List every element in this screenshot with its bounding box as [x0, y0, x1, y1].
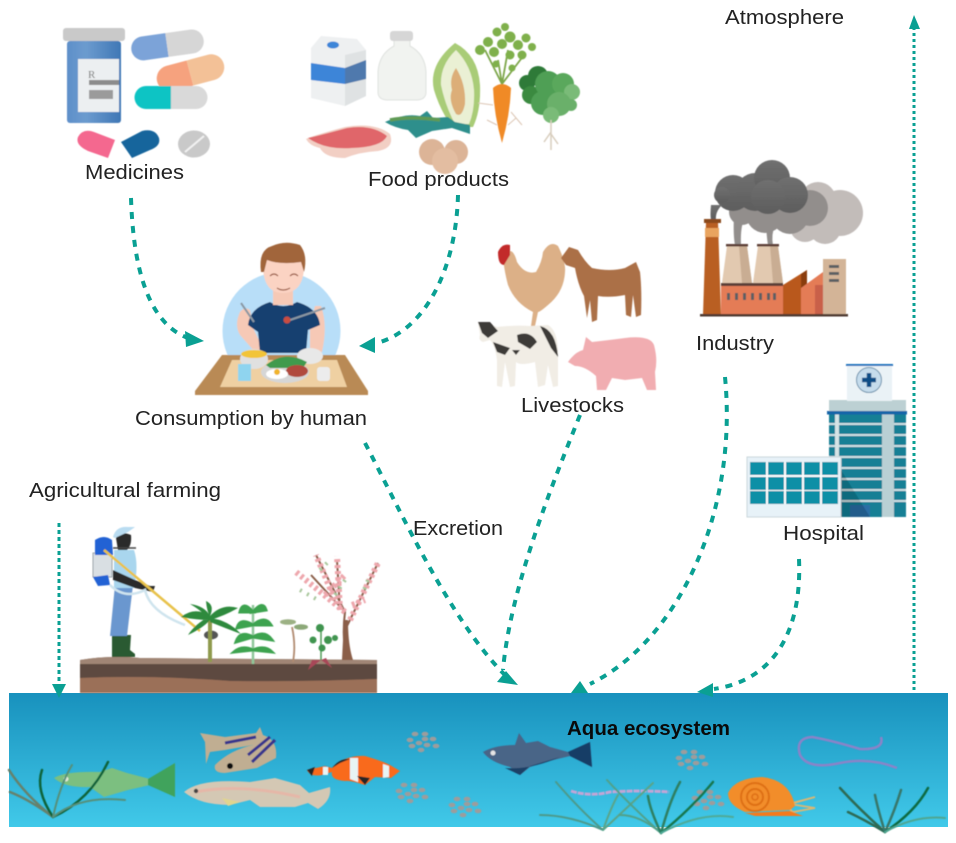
soil — [80, 657, 377, 693]
aquatic life — [9, 727, 945, 833]
orange capsule — [154, 51, 227, 94]
fish — [385, 111, 470, 138]
blossom tree — [296, 555, 378, 660]
illustration: person eating — [195, 243, 368, 395]
milk carton — [311, 36, 366, 106]
blue capsule — [130, 28, 205, 62]
rooster — [498, 244, 565, 326]
palm plant — [181, 601, 241, 662]
leafy shrub — [234, 605, 272, 664]
illustration: livestock animals — [478, 244, 656, 390]
icon: food products — [306, 23, 580, 174]
label: Industry: Industry — [696, 333, 774, 355]
icon: medicines — [63, 28, 227, 158]
panel: aqua ecosystem water body — [9, 693, 948, 827]
arrow: industry to water — [571, 377, 727, 693]
cooling towers — [722, 244, 783, 283]
label: Aqua ecosystem: Aqua ecosystem — [567, 718, 730, 740]
table with meal — [195, 348, 368, 395]
green fish — [54, 763, 175, 797]
small seedlings — [280, 619, 338, 670]
milk bottle — [378, 31, 426, 100]
blue capsule half — [121, 130, 159, 158]
eggs — [419, 139, 468, 174]
carrot — [475, 23, 536, 143]
illustration: industry factory — [700, 160, 863, 316]
goat — [561, 247, 641, 322]
label: Medicines: Medicines — [85, 162, 184, 184]
chimney — [703, 219, 721, 315]
zebrafish — [200, 727, 276, 773]
arrow: water to atmosphere — [909, 15, 920, 690]
low wing — [747, 457, 870, 517]
roof sign with cross — [846, 364, 893, 401]
lettuce head — [433, 43, 480, 127]
illustration: hospital — [747, 364, 907, 517]
pale worm — [571, 791, 669, 794]
label: Hospital: Hospital — [783, 523, 864, 545]
killifish — [184, 778, 330, 809]
pink capsule half — [77, 131, 115, 158]
arrow: excretion from human to water — [365, 443, 518, 685]
aquatic grass left — [9, 762, 125, 817]
teal capsule — [134, 86, 208, 109]
cow — [478, 322, 558, 387]
label: Atmosphere: Atmosphere — [725, 7, 844, 29]
blue circle — [222, 272, 340, 390]
aquatic grass center — [540, 780, 733, 833]
tablet — [178, 130, 210, 158]
egg clusters — [396, 732, 724, 817]
arrow: livestock to water — [503, 415, 580, 670]
arrow: medicines to human — [131, 198, 204, 347]
factory buildings — [700, 259, 848, 316]
head — [260, 243, 305, 305]
arrow: hospital to water — [697, 559, 799, 697]
pill bottle: R — [88, 69, 96, 81]
pig — [568, 337, 656, 390]
arrow: agricultural farming to water — [52, 523, 66, 698]
smoke clouds — [710, 160, 863, 245]
label: Livestocks: Livestocks — [521, 395, 624, 417]
tower — [827, 400, 907, 517]
purple worm — [799, 737, 897, 768]
label: Food products: Food products — [368, 169, 509, 191]
farmer with sprayer — [93, 527, 218, 657]
shirt and arms — [237, 302, 325, 355]
leafy greens — [519, 66, 580, 150]
label: Agricultural farming: Agricultural farming — [29, 480, 221, 502]
label: Consumption by human: Consumption by human — [135, 408, 367, 430]
arrow: food products to human — [359, 195, 458, 353]
pill bottle — [63, 28, 125, 123]
label: Excretion: Excretion — [413, 518, 503, 540]
dark fish — [483, 733, 592, 775]
snail — [728, 777, 815, 816]
aquatic grass right — [840, 788, 945, 832]
meat steak — [306, 126, 391, 158]
clownfish — [307, 756, 400, 785]
illustration: agricultural farming — [80, 527, 378, 693]
